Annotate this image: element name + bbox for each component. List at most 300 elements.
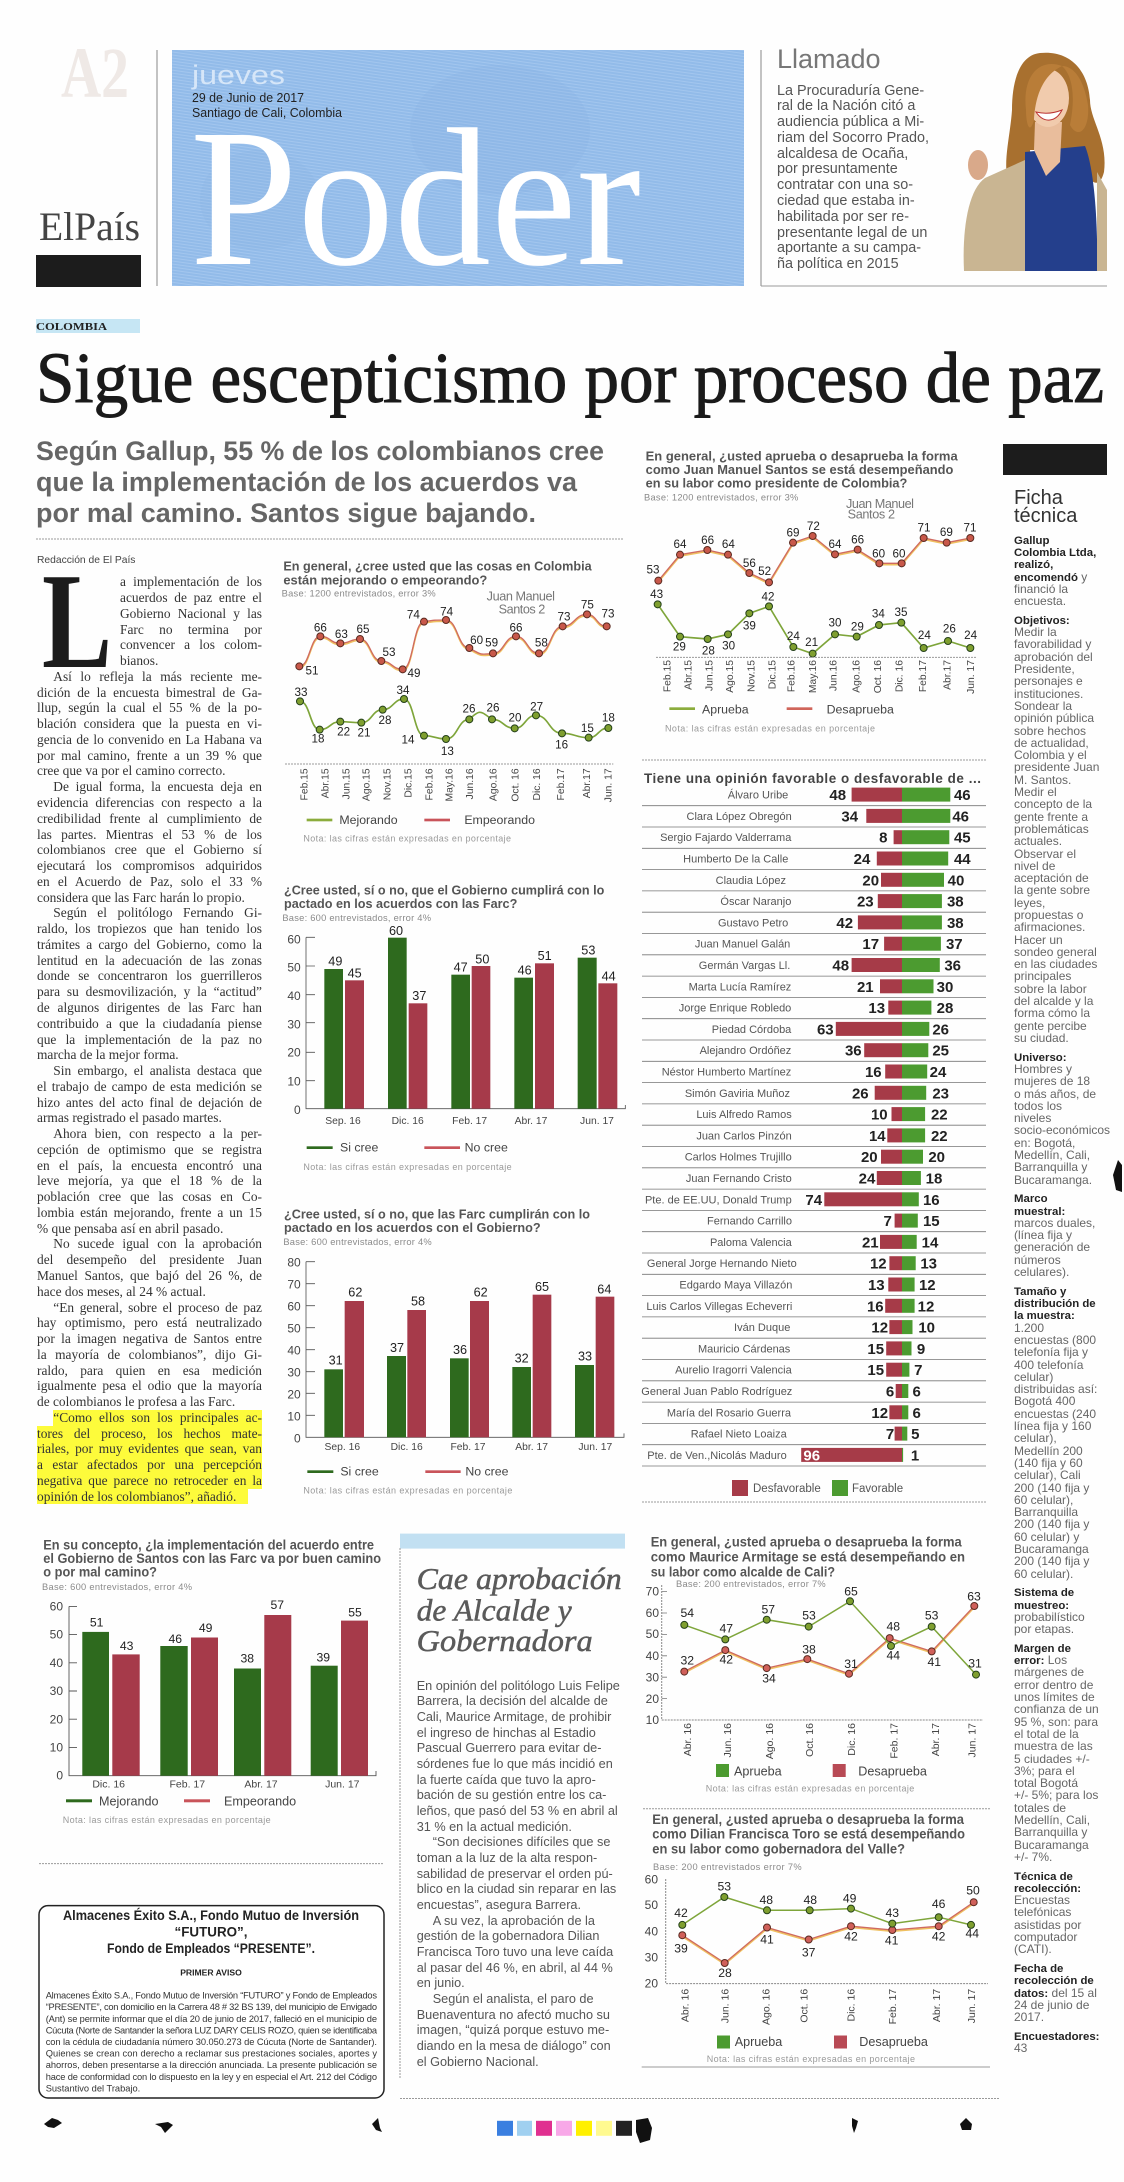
chart: cosas mejorando o empeorando: 51 <box>306 664 318 677</box>
text block: Ficha técnica details: encomendó y <box>1014 570 1087 584</box>
chart: aprobación Maurice Armitage: Abr. 16 <box>682 1723 694 1756</box>
chart: opinión favorable o desfavorable: Juan Manuel Galán <box>695 939 790 951</box>
chart: Gobierno cumplirá: 30 <box>287 1018 301 1032</box>
chart: Farc cumplirán: 31 <box>329 1353 343 1367</box>
text block: Ficha técnica details: instituciones. <box>1014 687 1083 701</box>
article body: opinión de los colombianos”, añadió. <box>37 1489 236 1504</box>
chart: aprobación Maurice Armitage: como Maurice Armitage se está desempeñando en <box>651 1549 965 1564</box>
text block: Ficha técnica details: muestreo: <box>1014 1600 1069 1612</box>
chart: opinión favorable o desfavorable: Paloma Valencia <box>710 1237 793 1249</box>
text block: Ficha técnica details: encuestas (240 <box>1014 1407 1096 1421</box>
chart: aprobación de Juan Manuel Santos: Nota: las cifras están expresadas en porcentaje <box>665 724 875 734</box>
chart: aprobación Maurice Armitage: 70 <box>646 1584 659 1598</box>
chart: opinión favorable o desfavorable: 16 <box>923 1192 940 1209</box>
chart: opinión favorable o desfavorable: 20 <box>861 1149 878 1166</box>
chart: aprobación Maurice Armitage: 31 <box>968 1656 982 1670</box>
article body: de algunos dirigentes de las Farc han <box>37 1000 262 1015</box>
chart: opinión favorable o desfavorable: 16 <box>865 1064 882 1081</box>
chart: opinión favorable o desfavorable: Pte. de Ven.,Nicolás Maduro <box>647 1450 787 1462</box>
chart: aprobación de Juan Manuel Santos: Feb.17 <box>918 660 929 692</box>
chart: Gobierno cumplirá: 20 <box>287 1046 301 1060</box>
chart: cosas mejorando o empeorando: Empeorando <box>464 813 535 827</box>
text block: Ficha técnica details: computador <box>1014 1930 1077 1944</box>
chart: aprobación Dilian Francisca Toro: Aprueba <box>735 2035 782 2049</box>
text block: Ficha técnica details: propuestas o <box>1014 908 1083 922</box>
chart: cosas mejorando o empeorando: 28 <box>379 714 391 727</box>
chart: aprobación Maurice Armitage: 65 <box>844 1584 858 1598</box>
text block: Ficha técnica details: 200 (140 fija y <box>1014 1517 1089 1531</box>
text block: Llamado: ral de la Nación citó a <box>777 98 915 114</box>
text block: Llamado: habilitada por ser re- <box>777 209 909 225</box>
chart: Gobierno cumplirá: 10 <box>287 1074 301 1088</box>
chart: opinión favorable o desfavorable: Gustavo Petro <box>718 917 788 929</box>
chart: implementación del acuerdo: Dic. 16 <box>92 1779 125 1791</box>
text block: Ficha técnica details: números <box>1014 1253 1061 1267</box>
text block: Ficha técnica details <box>1014 535 1110 2055</box>
chart: aprobación de Juan Manuel Santos: 34 <box>872 608 885 621</box>
chart: Gobierno cumplirá: Nota: las cifras están expresadas en porcentaje <box>303 1162 512 1172</box>
subtitle <box>36 436 624 539</box>
article body <box>37 574 262 1504</box>
chart: opinión favorable o desfavorable: 25 <box>932 1043 949 1060</box>
text block: Ficha técnica details: Medellín, Cali, <box>1014 1813 1090 1827</box>
chart: opinión favorable o desfavorable: 48 <box>829 787 846 804</box>
chart: Gobierno cumplirá: 60 <box>389 924 403 938</box>
chart: opinión favorable o desfavorable: Tiene una opinión favorable o desfavorable de ... <box>644 771 981 786</box>
text block: Ficha técnica details: 5 ciudades +/- <box>1014 1752 1090 1766</box>
black box: Ficha técnica header <box>1003 444 1107 475</box>
text block: Cae aprobación body: Francisca Toro tuvo una leve caída <box>417 1945 613 1959</box>
chart: Farc cumplirán <box>283 1206 624 1496</box>
text block: Ficha técnica details: Observar el <box>1014 846 1076 860</box>
chart: implementación del acuerdo: 38 <box>241 1652 254 1666</box>
chart: implementación del acuerdo: Empeorando <box>224 1795 296 1809</box>
chart: aprobación Dilian Francisca Toro: 50 <box>966 1884 980 1898</box>
chart: cosas mejorando o empeorando: Jun. 17 <box>603 768 614 802</box>
chart: aprobación de Juan Manuel Santos: Dic.15 <box>767 660 778 689</box>
text block: Ficha técnica details: muestra de las <box>1014 1739 1093 1753</box>
chart: aprobación Maurice Armitage: 34 <box>762 1671 776 1685</box>
text block: Ficha técnica details: Medellín 200 <box>1014 1444 1083 1458</box>
chart: aprobación Maurice Armitage: 53 <box>802 1609 816 1623</box>
chart: cosas mejorando o empeorando: 22 <box>337 725 350 738</box>
chart: Farc cumplirán: Base: 600 entrevistados, error 4% <box>283 1237 432 1247</box>
article body: evidencia diferencias con respecto a la <box>37 795 262 810</box>
notice: Almacenes Éxito legal ad: Almacenes Éxito S.A., Fondo Mutuo de Inversión “FUTURO” y Fondo de Empleados <box>46 1991 377 2001</box>
text block: Ficha técnica details: socio-económicos <box>1014 1123 1110 1137</box>
chart: aprobación Maurice Armitage: 42 <box>720 1652 733 1666</box>
chart: opinión favorable o desfavorable: 10 <box>918 1320 935 1337</box>
article body: blación considera que la puesta en vi- <box>37 716 262 731</box>
article body: a estar afectados por una percepción <box>37 1457 262 1472</box>
text block: Llamado: alcaldesa de Ocaña, <box>777 146 908 162</box>
chart: implementación del acuerdo: Feb. 17 <box>169 1779 205 1791</box>
chart: aprobación Maurice Armitage: 63 <box>967 1589 981 1603</box>
text block: Ficha técnica details: totales de <box>1014 1801 1066 1815</box>
text block: Ficha técnica details: Barranquilla y <box>1014 1160 1087 1174</box>
chart: aprobación de Juan Manuel Santos: 66 <box>851 534 864 547</box>
text block: Ficha técnica details: distribuidas así: <box>1014 1382 1097 1396</box>
chart: opinión favorable o desfavorable: 15 <box>923 1213 940 1230</box>
chart: aprobación Maurice Armitage: Dic. 16 <box>846 1723 858 1756</box>
chart: Farc cumplirán: Jun. 17 <box>578 1442 613 1453</box>
article body: raldo, para quien en esa medición <box>37 1363 262 1378</box>
text block: Ficha técnica details: Tamaño y <box>1014 1286 1066 1298</box>
article body: cepción de optimismo que se registra <box>37 1142 262 1157</box>
article body: Así lo refleja la más reciente me- <box>53 669 262 684</box>
chart: aprobación de Juan Manuel Santos: Juan Manuel <box>846 497 914 511</box>
chart: opinión favorable o desfavorable: 6 <box>913 1405 921 1422</box>
text block: Ficha técnica details: Medir la <box>1014 625 1057 639</box>
text block: Cae aprobación body: leños, que pasó del 53 % en abril al <box>417 1804 618 1818</box>
chart: Farc cumplirán: 36 <box>453 1343 467 1357</box>
chart: Gobierno cumplirá: No cree <box>465 1141 508 1155</box>
article body: acuerdos de paz entre el <box>120 590 262 605</box>
chart: aprobación Dilian Francisca Toro: 43 <box>886 1906 899 1920</box>
chart: aprobación Dilian Francisca Toro: 42 <box>932 1930 946 1944</box>
chart: cosas mejorando o empeorando: Dic.15 <box>403 768 414 798</box>
text block: Cae aprobación body: Según el analista, el paro de <box>433 1992 594 2006</box>
text block: Cae aprobación body: en junio. <box>417 1976 465 1990</box>
text block: Ficha técnica details: generación de <box>1014 1240 1090 1254</box>
subtitle: que la implementación de los acuerdos va <box>36 467 578 497</box>
article body: bianos. <box>120 653 158 668</box>
text block: Ficha técnica details: Fecha de <box>1014 1963 1063 1975</box>
text block: Ficha técnica details: la muestra: <box>1014 1310 1075 1322</box>
text block: Ficha técnica details: de actualidad, <box>1014 736 1089 750</box>
text block: Llamado: contratar con una so- <box>777 177 913 193</box>
text block: Ficha técnica details: forma cómo la <box>1014 1006 1090 1020</box>
chart: aprobación de Juan Manuel Santos: Jun. 17 <box>966 660 977 694</box>
chart: aprobación Dilian Francisca Toro <box>642 1812 990 2067</box>
section masthead: page number and logo: A2 <box>61 33 129 113</box>
chart: implementación del acuerdo: 60 <box>50 1600 63 1614</box>
chart: opinión favorable o desfavorable: 24 <box>930 1064 947 1081</box>
article body: lombia están mejorando, frente a un 15 <box>37 1205 262 1220</box>
text block: Ficha técnica details: celular) <box>1014 1370 1053 1384</box>
chart: opinión favorable o desfavorable: 36 <box>944 958 961 974</box>
chart: aprobación de Juan Manuel Santos <box>644 449 978 734</box>
article body: No sucede igual con la aprobación <box>53 1236 262 1251</box>
chart: aprobación Maurice Armitage: 30 <box>646 1670 659 1684</box>
chart: implementación del acuerdo: Abr. 17 <box>244 1779 278 1791</box>
chart: Farc cumplirán: 80 <box>287 1256 301 1270</box>
text block: Ficha técnica details: todos los <box>1014 1099 1062 1113</box>
chart: aprobación de Juan Manuel Santos: Feb.15 <box>662 660 673 692</box>
chart: aprobación Dilian Francisca Toro: 42 <box>844 1930 858 1944</box>
chart: opinión favorable o desfavorable: 12 <box>919 1277 936 1294</box>
chart: aprobación Maurice Armitage: Desaprueba <box>858 1764 927 1778</box>
chart: implementación del acuerdo: 0 <box>56 1769 63 1783</box>
chart: Gobierno cumplirá: 60 <box>287 932 301 946</box>
article body: igualmente pesa el odio que la mayoría <box>37 1378 262 1393</box>
text block: Ficha técnica details: Hombres y <box>1014 1062 1072 1076</box>
text block: Ficha técnica details: problemáticas <box>1014 822 1089 836</box>
chart: cosas mejorando o empeorando: Base: 1200 entrevistados, error 3% <box>282 589 436 599</box>
text block: Ficha técnica details: concepto de la <box>1014 797 1092 811</box>
chart: opinión favorable o desfavorable: 36 <box>845 1043 862 1060</box>
chart: opinión favorable o desfavorable: Carlos Holmes Trujillo <box>685 1152 792 1164</box>
chart: cosas mejorando o empeorando: 60 <box>470 634 484 647</box>
panel: Poder section banner <box>172 50 744 307</box>
text block: Ficha técnica details: 60 celular). <box>1014 1567 1073 1581</box>
text block: Cae aprobación body: bación de su gestión entre los ca- <box>417 1788 606 1802</box>
text block: Cae aprobación body: encuestas”, asegura Barrera. <box>417 1898 581 1912</box>
notice: Almacenes Éxito legal ad: Almacenes Éxito S.A., Fondo Mutuo de Inversión <box>63 1908 359 1923</box>
panel frame: Cae aprobación heading: de Alcalde y <box>417 1593 572 1628</box>
chart: aprobación de Juan Manuel Santos: May.16 <box>808 660 819 693</box>
chart: Gobierno cumplirá: 49 <box>328 955 342 969</box>
chart: aprobación de Juan Manuel Santos: como Juan Manuel Santos se está desempeñando <box>646 462 953 477</box>
chart: aprobación de Juan Manuel Santos: 52 <box>758 565 771 578</box>
chart: Gobierno cumplirá <box>282 882 625 1172</box>
text block: Ficha técnica details: (CATI). <box>1014 1942 1052 1956</box>
article body: Manuel Santos, que bajó del 26 %, de <box>37 1268 262 1283</box>
text block: Ficha técnica details: Presidente, <box>1014 662 1075 676</box>
chart: opinión favorable o desfavorable: 7 <box>884 1213 892 1230</box>
article body: en el Acuerdo de Paz, solo el 33 % <box>37 874 262 889</box>
chart: cosas mejorando o empeorando: Feb.15 <box>299 768 310 800</box>
chart: opinión favorable o desfavorable: Favorable <box>852 1483 903 1495</box>
notice: Almacenes Éxito legal ad: “FUTURO”, <box>175 1924 247 1940</box>
chart: cosas mejorando o empeorando: 20 <box>509 712 522 725</box>
text block: Ficha técnica details: sobre la labor <box>1014 982 1087 996</box>
chart: cosas mejorando o empeorando <box>282 559 615 844</box>
chart: Farc cumplirán: 10 <box>287 1409 301 1423</box>
chart: implementación del acuerdo: o por mal camino? <box>43 1564 157 1579</box>
chart: aprobación de Juan Manuel Santos: 69 <box>787 526 799 539</box>
chart: opinión favorable o desfavorable: Aurelio Iragorri Valencia <box>675 1365 793 1377</box>
chart: aprobación de Juan Manuel Santos: Feb.16 <box>787 660 798 692</box>
chart: opinión favorable o desfavorable: 6 <box>886 1384 894 1400</box>
chart: cosas mejorando o empeorando: Dic. 16 <box>532 768 543 800</box>
text block: Ficha técnica details: gente percibe <box>1014 1019 1087 1033</box>
chart: Gobierno cumplirá: 46 <box>518 964 532 978</box>
chart: aprobación Dilian Francisca Toro: 46 <box>932 1897 946 1911</box>
text block: Ficha técnica details: Marco <box>1014 1193 1048 1205</box>
article body: colombianos cree que el Gobierno sí <box>37 842 262 857</box>
chart: Farc cumplirán: Dic. 16 <box>391 1442 423 1453</box>
chart: implementación del acuerdo: En su concepto, ¿la implementación del acuerdo entre <box>43 1537 374 1552</box>
chart: aprobación de Juan Manuel Santos: Abr.17 <box>943 660 954 690</box>
chart: Gobierno cumplirá: 44 <box>602 969 616 983</box>
text block: Ficha técnica details: Encuestas <box>1014 1893 1070 1907</box>
text block: Ficha técnica details: principales <box>1014 969 1071 983</box>
chart: opinión favorable o desfavorable: 74 <box>805 1192 823 1209</box>
text block: Ficha técnica details: muestral: <box>1014 1206 1065 1218</box>
panel: Poder section banner: 29 de Junio de 2017 <box>192 90 304 105</box>
chart: aprobación Maurice Armitage: En general, ¿usted aprueba o desaprueba la forma <box>651 1534 962 1549</box>
chart: aprobación de Juan Manuel Santos: Abr.15 <box>684 660 695 690</box>
chart: aprobación Maurice Armitage: 47 <box>720 1622 733 1636</box>
chart: opinión favorable o desfavorable: 12 <box>870 1256 887 1273</box>
chart: opinión favorable o desfavorable: 63 <box>817 1021 834 1038</box>
chart: opinión favorable o desfavorable: 40 <box>948 872 964 889</box>
chart: aprobación Dilian Francisca Toro: 42 <box>674 1906 688 1920</box>
chart: aprobación Dilian Francisca Toro: 53 <box>718 1880 731 1894</box>
chart: opinión favorable o desfavorable: 44 <box>954 851 971 868</box>
text block: Ficha técnica details: 60 celular) y <box>1014 1530 1079 1544</box>
chart: opinión favorable o desfavorable: Luis Carlos Villegas Echeverri <box>646 1301 792 1313</box>
chart: opinión favorable o desfavorable: 14 <box>869 1128 886 1145</box>
chart: Gobierno cumplirá: 0 <box>294 1103 301 1117</box>
chart: cosas mejorando o empeorando: 26 <box>463 702 475 715</box>
text block: Ficha técnica details: 60 celular), <box>1014 1493 1073 1507</box>
chart: aprobación Dilian Francisca Toro: 41 <box>885 1934 899 1948</box>
chart: cosas mejorando o empeorando: 49 <box>408 667 420 680</box>
chart: aprobación Dilian Francisca Toro: como Dilian Francisca Toro se está desempeñando <box>652 1827 965 1842</box>
chart: opinión favorable o desfavorable: Clara López Obregón <box>687 811 792 823</box>
chart: aprobación de Juan Manuel Santos: 30 <box>722 639 736 652</box>
chart: opinión favorable o desfavorable: 24 <box>854 851 871 868</box>
chart: opinión favorable o desfavorable: 10 <box>871 1107 888 1124</box>
chart: aprobación de Juan Manuel Santos: 29 <box>851 621 864 634</box>
chart: aprobación Maurice Armitage: 32 <box>681 1654 694 1668</box>
chart: aprobación de Juan Manuel Santos: En general, ¿usted aprueba o desaprueba la forma <box>646 449 958 464</box>
article body: trámites a cargo del Gobierno, como la <box>37 937 262 952</box>
text block: Ficha técnica details: Sistema de <box>1014 1587 1074 1599</box>
text block: Ficha técnica details: Margen de <box>1014 1643 1071 1655</box>
text block: Ficha técnica details: 200 (140 fija y <box>1014 1481 1089 1495</box>
chart: cosas mejorando o empeorando: Ago.15 <box>362 768 373 801</box>
chart: Gobierno cumplirá: 40 <box>287 989 301 1003</box>
photo: portrait of Miriam Prado <box>964 53 1107 271</box>
text block: Ficha técnica details: 1.200 <box>1014 1321 1044 1335</box>
drop cap L: L <box>42 545 112 697</box>
chart: Farc cumplirán: 32 <box>515 1352 529 1366</box>
article body: dición de la encuesta bimestral de Ga- <box>37 685 262 700</box>
chart: opinión favorable o desfavorable: 38 <box>947 915 964 932</box>
chart: opinión favorable o desfavorable: 21 <box>862 1234 879 1251</box>
chart: aprobación Maurice Armitage: 20 <box>646 1692 659 1706</box>
article body: Gobierno Nacional y las <box>120 606 262 621</box>
chart: opinión favorable o desfavorable: 6 <box>913 1384 921 1400</box>
chart: aprobación Maurice Armitage: Nota: las cifras están expresadas en porcentaje <box>706 1784 914 1794</box>
text block: Ficha técnica details: favorabilidad y <box>1014 637 1091 651</box>
chart: aprobación Dilian Francisca Toro: 28 <box>718 1966 732 1980</box>
chart: cosas mejorando o empeorando: Abr.15 <box>320 768 331 798</box>
notice: Almacenes Éxito legal ad: Quienes se crean con derecho a reclamar sus prestaciones sociales, aportes y <box>46 2049 377 2059</box>
text block: Ficha técnica details: Gallup <box>1014 535 1049 547</box>
chart: Farc cumplirán: 37 <box>390 1341 404 1355</box>
notice: Almacenes Éxito legal ad: “PRESENTE”, con domicilio en la Carrera 48 # 32 BS 139, del municipio de Envigado <box>46 2002 377 2012</box>
text block: Llamado: aportante a su campa- <box>777 240 921 256</box>
text block: Ficha técnica details: 200 (140 fija y <box>1014 1554 1089 1568</box>
chart: opinión favorable o desfavorable: 34 <box>841 808 859 825</box>
chart: opinión favorable o desfavorable: 13 <box>868 1277 885 1294</box>
chart: aprobación de Juan Manuel Santos: 60 <box>893 547 906 560</box>
text block: Ficha técnica details: la gente sobre <box>1014 883 1090 897</box>
text block: Ficha técnica details: Barranquilla <box>1014 1505 1078 1519</box>
text block: Ficha técnica details: celular), <box>1014 1431 1057 1445</box>
chart: cosas mejorando o empeorando: 63 <box>335 628 348 641</box>
text block: Ficha técnica details: en las ciudades <box>1014 957 1097 971</box>
chart: Gobierno cumplirá: 45 <box>348 966 362 980</box>
chart: aprobación de Juan Manuel Santos: 72 <box>807 520 820 533</box>
chart: opinión favorable o desfavorable: 37 <box>946 936 963 953</box>
chart: aprobación de Juan Manuel Santos: 60 <box>872 547 886 560</box>
text block: Cae aprobación body <box>416 1679 620 2069</box>
article body: para su desmovilización, y la “actitud” <box>37 984 262 999</box>
chart: implementación del acuerdo: 50 <box>50 1628 63 1642</box>
notice: Almacenes Éxito legal ad: ahorros, deben presentarse a la dirección anunciada. La presente publicación se <box>46 2060 377 2070</box>
text block: Ficha técnica details: telefonía fija y <box>1014 1345 1088 1359</box>
article body: “En general, sobre el proceso de paz <box>53 1300 262 1315</box>
chart: aprobación de Juan Manuel Santos: Desaprueba <box>827 702 894 716</box>
chart: opinión favorable o desfavorable: Juan Carlos Pinzón <box>696 1130 792 1142</box>
chart: opinión favorable o desfavorable: 14 <box>922 1234 939 1251</box>
chart: opinión favorable o desfavorable: Néstor Humberto Martínez <box>662 1066 791 1078</box>
chart: aprobación Dilian Francisca Toro: Jun. 17 <box>966 1989 978 2023</box>
article body: lentitud en la adecuación de las zonas <box>37 953 262 968</box>
text block: Ficha técnica details: su ciudad. <box>1014 1031 1069 1045</box>
chart: opinión favorable o desfavorable: Edgardo Maya Villazón <box>679 1280 792 1292</box>
text block: Cae aprobación body: 31 % en la actual medición. <box>417 1820 572 1834</box>
chart: opinión favorable o desfavorable: 23 <box>932 1085 949 1102</box>
text block: Ficha técnica details: recolección: <box>1014 1883 1081 1895</box>
chart: opinión favorable o desfavorable: 13 <box>920 1256 937 1273</box>
notice: Almacenes Éxito legal ad: PRIMER AVISO <box>180 1968 242 1978</box>
article body: Según el politólogo Fernando Gi- <box>53 905 262 920</box>
chart: aprobación Maurice Armitage: 53 <box>925 1609 939 1623</box>
text block: Ficha técnica details: error dentro de <box>1014 1678 1093 1692</box>
text block: Cae aprobación body: la fuerte caída que tuvo la apro- <box>417 1773 596 1787</box>
chart: aprobación Dilian Francisca Toro: En general, ¿usted aprueba o desaprueba la forma <box>652 1812 965 1827</box>
notice: Almacenes Éxito legal ad: Sustantivo del Trabajo. <box>46 2083 140 2093</box>
text block: Ficha técnica details: Bucaramanga <box>1014 1838 1089 1852</box>
chart: opinión favorable o desfavorable: Desfavorable <box>753 1483 821 1495</box>
text block: Ficha técnica details: leyes, <box>1014 896 1045 910</box>
chart: aprobación de Juan Manuel Santos: 35 <box>895 606 907 619</box>
chart: opinión favorable o desfavorable: 26 <box>932 1021 949 1038</box>
chart: opinión favorable o desfavorable: 9 <box>917 1341 925 1358</box>
text block: Llamado: audiencia pública a Mi- <box>777 114 924 130</box>
text block: Ficha técnica details: niveles <box>1014 1111 1051 1125</box>
chart: aprobación de Juan Manuel Santos: 69 <box>940 526 953 539</box>
text block: Ficha técnica details: personajes e <box>1014 674 1083 688</box>
text block: Ficha técnica details: el total de la <box>1014 1727 1079 1741</box>
chart: aprobación Maurice Armitage: Jun. 16 <box>722 1723 734 1757</box>
text block: Ficha técnica details: opinión pública <box>1014 711 1094 725</box>
chart: aprobación de Juan Manuel Santos: 21 <box>805 636 818 649</box>
chart: opinión favorable o desfavorable: Marta Lucía Ramírez <box>689 981 791 993</box>
chart: aprobación de Juan Manuel Santos: 64 <box>674 538 687 551</box>
text block: Ficha técnica details: realizó, <box>1014 559 1053 571</box>
article body: raldo, los tropiezos que han tenido los <box>37 921 262 936</box>
chart: Farc cumplirán: 58 <box>411 1294 425 1308</box>
text block: Ficha técnica details: celular), Cali <box>1014 1468 1081 1482</box>
text block: Ficha técnica details: 95 %, son: para <box>1014 1715 1098 1729</box>
chart: aprobación Dilian Francisca Toro: 30 <box>645 1950 658 1964</box>
chart: aprobación Dilian Francisca Toro: 48 <box>760 1893 773 1907</box>
article body: de colombianos le profesa a las Farc. <box>37 1394 235 1409</box>
chart: implementación del acuerdo: 39 <box>317 1650 330 1664</box>
text block: Ficha técnica details: aprobación del <box>1014 650 1093 664</box>
chart: Gobierno cumplirá: Jun. 17 <box>580 1116 614 1127</box>
notice: Almacenes Éxito legal ad: (Ant) se permite informar que el día 20 de junio de 2017, falleció en el municipio de <box>46 2014 377 2024</box>
panel: Poder section banner: Poder <box>190 88 641 307</box>
chart: aprobación de Juan Manuel Santos: Ago.16 <box>852 660 863 693</box>
article body: Farc no termina por <box>120 622 262 637</box>
article body: en el país, la encuesta encontró una <box>37 1158 262 1173</box>
chart: opinión favorable o desfavorable: 15 <box>867 1341 884 1358</box>
chart: cosas mejorando o empeorando: Oct. 16 <box>510 768 521 802</box>
chart: Gobierno cumplirá: Base: 600 entrevistados, error 4% <box>282 913 431 923</box>
article body: Sin embargo, el analista destaca que <box>53 1063 262 1078</box>
article body: por la imagen negativa de Santos entre <box>37 1331 262 1346</box>
chart: cosas mejorando o empeorando: 33 <box>295 686 307 699</box>
chart: cosas mejorando o empeorando: Feb.17 <box>556 768 567 800</box>
